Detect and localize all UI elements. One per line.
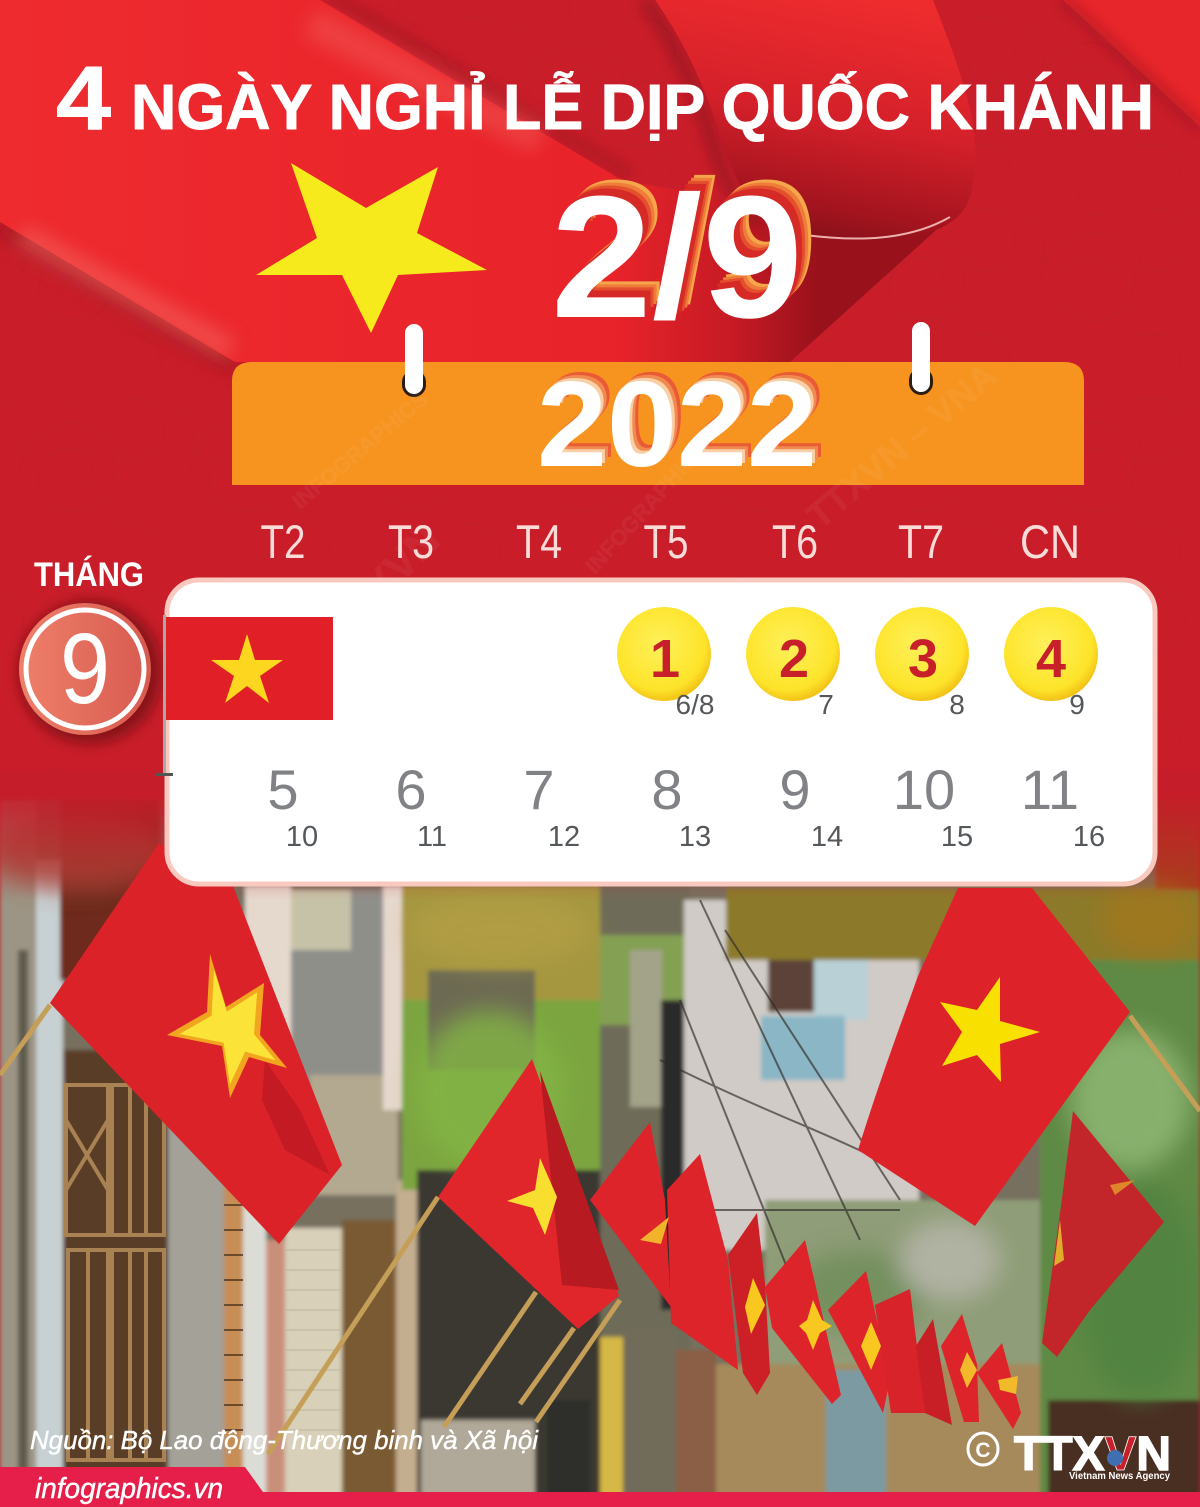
- fade from red field into photo: [0, 770, 1200, 900]
- weekday headers: T7: [898, 515, 944, 568]
- year 2022: 2022: [546, 347, 826, 483]
- weekday headers: T5: [644, 515, 688, 568]
- background: street photo: [0, 800, 1200, 1507]
- logo: TTXVN: Vietnam News Agency: [1069, 1471, 1170, 1482]
- second week row: 5: [267, 758, 299, 821]
- lunar dates: 16: [1073, 821, 1105, 853]
- day 2: 2: [779, 629, 809, 689]
- date 2/9: 2/9: [557, 152, 809, 347]
- binder ring left: [402, 324, 426, 397]
- year 2022: 2022: [540, 353, 820, 489]
- month label: [18, 556, 162, 744]
- second week row: 9: [779, 758, 811, 821]
- second week row: [267, 758, 1079, 821]
- lunar dates: [286, 821, 1105, 853]
- title: NGÀY NGHỈ LỄ DỊP QUỐC KHÁNH: [131, 70, 1154, 143]
- weekday headers: T2: [260, 515, 306, 568]
- holiday days row: [617, 607, 1098, 720]
- weekday headers: CN: [1020, 515, 1080, 568]
- footer bar: [0, 1467, 1200, 1507]
- flag: left large: [50, 843, 342, 1244]
- lunar dates: 12: [548, 821, 580, 853]
- icon: yellow star: [256, 163, 487, 333]
- lunar dates: 10: [286, 821, 318, 853]
- weekday headers: [260, 515, 1080, 568]
- source note: Nguồn: Bộ Lao động-Thương binh và Xã hội: [30, 1425, 539, 1455]
- calendar header bar: [232, 322, 1084, 492]
- second week row: 6: [395, 758, 427, 821]
- day 2: 7: [818, 689, 834, 720]
- flag: right large: [858, 888, 1130, 1226]
- copyright mark: C: [975, 1439, 991, 1462]
- lunar dates: 15: [941, 821, 973, 853]
- lunar dates: 11: [417, 821, 447, 853]
- door lattice: [66, 1085, 164, 1460]
- watermarks: INFOGRAPHICS: [287, 386, 432, 514]
- second week row: 11: [1021, 758, 1079, 821]
- day 1: 6/8: [676, 689, 714, 720]
- watermarks: [287, 354, 1004, 646]
- cables: [620, 900, 900, 1300]
- weekday headers: T3: [388, 515, 434, 568]
- binder ring right: [909, 322, 933, 395]
- background: red patterned field: [0, 0, 1200, 900]
- red ribbon banner at top: [0, 0, 1200, 365]
- year 2022: 2022: [543, 350, 823, 486]
- day 4: 4: [1036, 629, 1066, 689]
- day 3: 8: [949, 689, 965, 720]
- flag poles: [0, 1005, 1200, 1454]
- second week row: 10: [893, 758, 955, 821]
- weekday headers: T4: [516, 515, 562, 568]
- logo: TTXVN: TTXVN: [1014, 1428, 1171, 1481]
- day 3: 3: [908, 629, 938, 689]
- date 2/9: 2/9: [563, 146, 815, 341]
- weekday headers: T6: [772, 515, 818, 568]
- flag: center: [438, 1059, 619, 1329]
- month badge 9: 9: [60, 613, 110, 725]
- watermarks: TTXVN – VNA: [799, 354, 1004, 536]
- date 2/9: 2/9: [551, 159, 803, 354]
- footer bar: infographics.vn: [35, 1473, 223, 1505]
- title: [56, 49, 1154, 149]
- day 4: [1004, 607, 1098, 720]
- watermarks: TTXVN: [318, 516, 449, 646]
- month badge 9: [18, 600, 162, 744]
- second week row: 7: [523, 758, 555, 821]
- date 2/9: 2/9: [566, 143, 818, 338]
- date 2/9: 2/9: [560, 149, 812, 344]
- flag: far right: [1042, 1111, 1164, 1357]
- flags: receding row: [590, 1122, 1021, 1429]
- second week row: 8: [651, 758, 683, 821]
- watermarks: INFOGRAPHICS: [580, 436, 712, 578]
- day 3: [875, 607, 969, 720]
- day 2: [746, 607, 840, 720]
- year 2022: 2022: [537, 356, 817, 492]
- day 1: [617, 607, 714, 720]
- copyright mark: [968, 1433, 998, 1465]
- title: 4: [56, 49, 111, 149]
- month label: THÁNG: [34, 556, 144, 594]
- lunar dates: 14: [811, 821, 843, 853]
- calendar panel: [155, 580, 1155, 884]
- slats and shutters: [224, 1205, 243, 1430]
- day 1: 1: [650, 629, 680, 689]
- flags along the street: [50, 843, 1164, 1429]
- icon: small Vietnam flag: [155, 615, 333, 776]
- lunar dates: 13: [679, 821, 711, 853]
- day 4: 9: [1069, 689, 1085, 720]
